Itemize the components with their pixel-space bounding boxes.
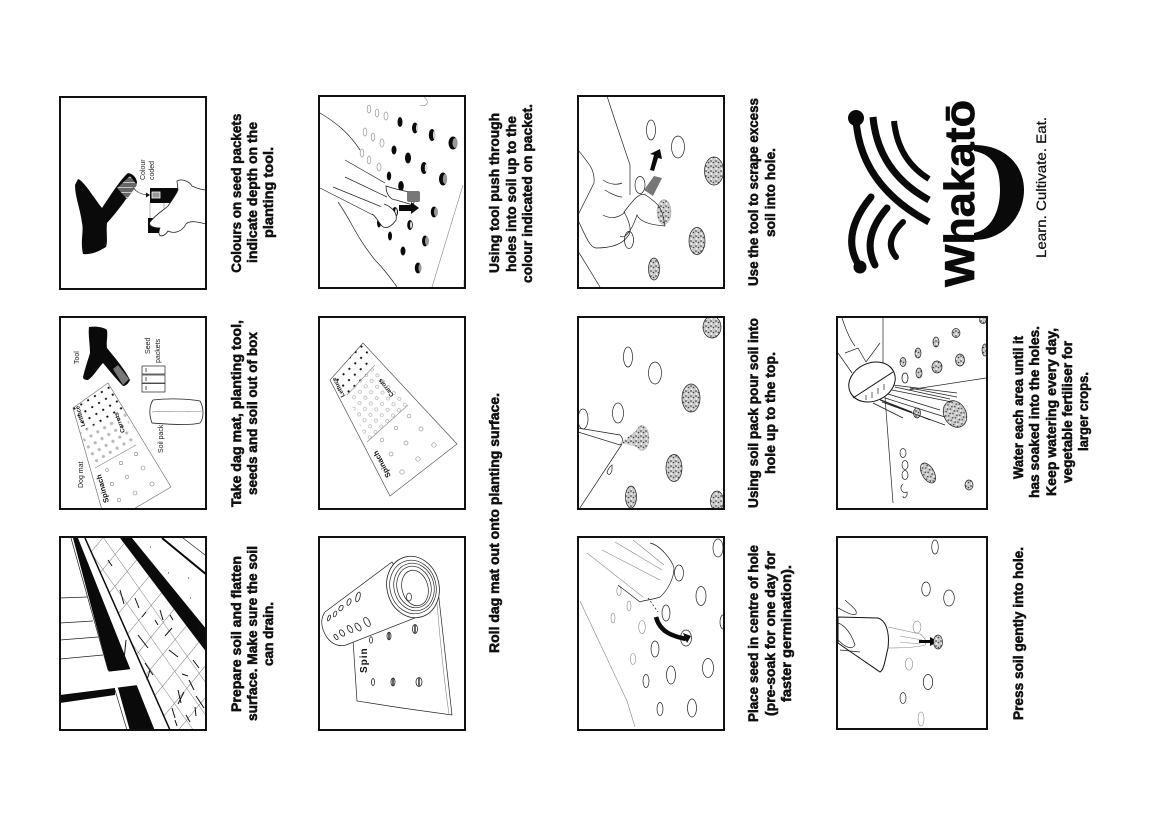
rose ellipse [842,355,902,409]
seed packet [148,188,178,233]
soil specks [108,560,204,726]
caption: step 1 box: Take dag mat, planting tool, [228,320,244,507]
label: seed packets [145,338,162,363]
frame [319,96,465,288]
panel: pour soil [572,316,724,520]
illustration: garden bed [60,538,207,731]
illustration: dag mat [330,343,457,496]
soil patches [900,316,988,490]
logo upper arcs [856,117,929,222]
frame [578,317,724,509]
hole highlights [395,124,458,272]
caption: step 5 seed: faster germination). [778,565,794,702]
caption: step 9 water: Water each area until it [1010,336,1026,479]
frame [319,537,465,730]
mat holes [370,624,422,686]
thimble tip [407,191,420,202]
illustration: watering can [838,316,988,503]
caption: step 3 push [486,104,535,283]
panel: push tool through holes [319,96,465,288]
seed packet row [142,366,165,392]
frame [60,537,206,730]
caption: step 9 water: has soaked into the holes. [1026,326,1042,498]
caption: step 0 soil [228,546,276,721]
dog mat: Lettuce [75,404,87,427]
panel: mat on surface [319,317,465,509]
fingers under [888,627,926,648]
instruction sheet [59,95,1092,731]
frame [60,97,206,289]
soil in hole [934,635,942,649]
panel: rolled mat [319,537,465,730]
caption: step 9 water: vegetable fertiliser for [1059,340,1075,483]
black borders [73,538,207,731]
mat right edge double [436,592,449,714]
caption: step 5 seed [745,545,794,722]
pack [838,617,888,672]
soil stream [620,428,642,448]
holes [900,540,954,726]
caption: step 4 roll: Roll dag mat out onto planting surface. [486,393,502,653]
seed drop dashes [648,598,658,612]
caption: step 9 water [1010,326,1091,498]
caption: step 6 pour: hole up to the top. [762,352,778,474]
caption: step 6 pour: Using soil pack pour soil into [745,318,761,508]
caption: step 0 soil: can drain. [260,602,276,666]
white crossbar [108,669,137,688]
caption: step 2 colours: Colours on seed packets [228,113,244,273]
caption: step 8 press: Press soil gently into hole. [1010,547,1026,720]
mat edge [420,96,464,288]
frame [578,537,724,730]
panel: place seed [578,537,726,730]
mat labels: Carrots [377,376,396,397]
caption: step 3 push: Using tool push through [486,113,502,273]
icon: hand [150,180,206,236]
tool tip hatch [117,176,137,199]
black holes [377,117,458,274]
logo: Whakatō [848,100,1024,287]
mat outline [330,343,457,496]
icon: tool [83,327,130,386]
label: seed packets: packets [155,338,162,363]
panel: scrape soil [578,96,724,288]
water streams [873,385,957,425]
caption: step 7 scrape [745,98,778,286]
logo ball lower [854,260,866,274]
illustration: mat, tool, packets, soil [73,327,203,510]
illustration: hand placing seed [580,539,726,727]
flat mat [353,590,452,715]
soil pack [150,399,203,425]
roll end rings [380,550,446,624]
arrow: tip to packet [133,187,150,198]
illustration: tool and hand with packet [75,159,206,254]
dog mat [73,383,171,510]
panel: colour coded packet [60,97,206,289]
mat edge [580,601,635,727]
illustration: hand and holes [320,96,464,288]
frame [837,537,987,729]
label: colour coded: Colour [140,159,147,180]
arrow: press [919,637,938,646]
illustration: press into hole [838,540,954,726]
lettuce section [330,343,375,395]
label: seed packets: Seed [145,338,152,354]
illustration: pouring soil pack [572,316,724,520]
hand [320,113,416,287]
caption: step 0 soil: surface. Make sure the soil [244,546,260,721]
caption: step 9 water: larger crops. [1075,372,1091,451]
icon: planting tool [75,173,137,254]
soil bed [85,538,207,730]
caption: step 7 scrape: Use the tool to scrape excess [745,98,761,286]
logo crescent [974,145,1024,240]
dog mat: Carrots [114,411,127,433]
tool tip [113,365,129,385]
caption: step 3 push: colour indicated on packet. [519,104,535,283]
faded holes [360,105,388,171]
label: soil pack: Soil pack [158,424,165,453]
timber lines [60,688,115,703]
illustration: roll [322,550,452,715]
arrow: push [399,202,419,214]
caption: step 2 colours: planting tool. [260,147,276,238]
caption: step 7 scrape: soil into hole. [762,148,778,237]
soil holes [648,157,724,280]
label: dog mat: Dog mat [78,461,85,488]
carrots section [347,365,408,442]
small hole ovals [900,448,908,498]
watering can head [838,318,880,373]
hand [578,96,665,287]
caption: step 3 push: holes into soil up to the [503,116,519,272]
panel: box contents [60,317,206,510]
watering lines ground [883,318,986,503]
spinach label: Spin [359,647,370,673]
tool tip [644,176,662,196]
frame [837,317,987,509]
panel: press soil [837,537,987,729]
roll holes [327,592,372,640]
panel: prepare soil [60,537,207,731]
caption: step 6 pour [745,318,778,508]
mat labels: Spinach [371,449,393,479]
frame [60,317,206,509]
soil holes [626,316,724,511]
caption: step 5 seed: (pre-soak for one day for [762,550,778,716]
caption: step 2 colours: indicate depth on the [244,122,260,263]
caption: step 2 colours [228,113,276,273]
caption: step 0 soil: Prepare soil and flatten [228,556,244,712]
panel: watering [837,316,988,509]
tagline: Learn. Cultivate. Eat. [1033,117,1049,258]
label: colour coded [140,160,154,180]
finger tips on pack [838,600,860,652]
mat labels [331,375,396,479]
hand [587,540,674,602]
label: tool: Tool [74,351,81,364]
label: colour coded: coded [149,161,156,180]
frame [319,317,465,509]
caption: step 5 seed: Place seed in centre of hole [745,545,761,722]
mat labels: Lettuce [331,375,347,398]
spinach holes [380,414,436,474]
caption: step 1 box: seeds and soil out of box [244,332,260,495]
logo lower arcs [852,197,903,267]
soil pack spout [572,428,622,520]
arrow: scrape direction [650,149,662,171]
illustration: hand scraping soil [578,96,724,287]
wordmark: Whakatō [936,100,983,287]
frame [578,96,724,288]
logo ball upper [848,110,864,126]
arrow: curved seed path [656,617,686,639]
section dividers [347,365,408,442]
roll body [322,562,425,646]
holes [611,539,726,717]
open holes [578,347,662,429]
open holes [624,120,684,248]
caption: step 1 box [228,320,260,507]
dog mat: Spinach [94,473,111,504]
specks on ground [150,547,191,598]
caption: step 9 water: Keep watering every day, [1043,328,1059,496]
